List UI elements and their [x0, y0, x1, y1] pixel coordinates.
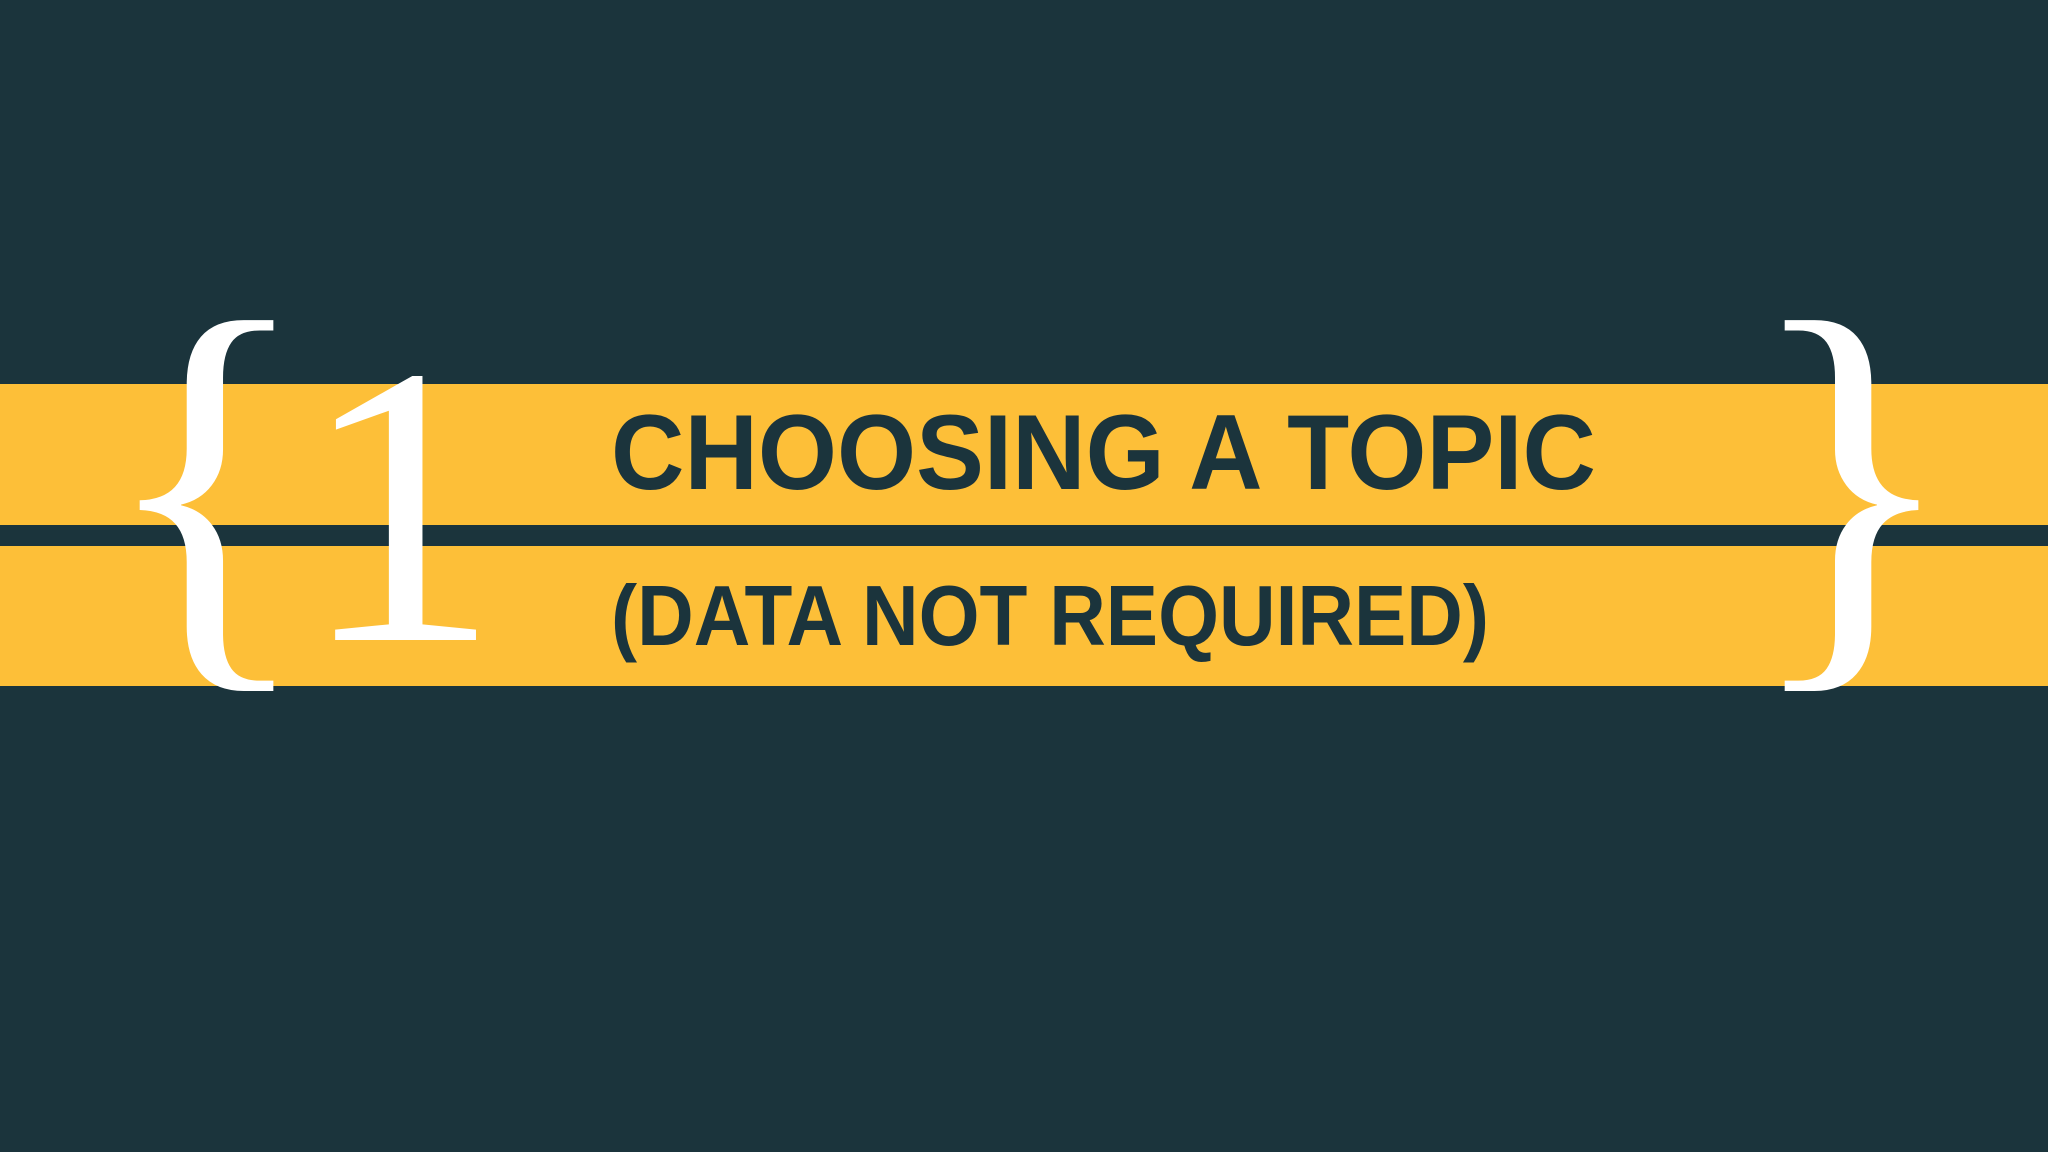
title: CHOOSING A TOPIC — [611, 392, 1596, 512]
subtitle: (DATA NOT REQUIRED) — [611, 569, 1489, 664]
band: top yellow — [0, 384, 2048, 525]
number 1: 1 — [300, 284, 500, 727]
left brace: { — [99, 232, 314, 728]
band: bottom yellow — [0, 546, 2048, 686]
right brace: } — [1744, 232, 1959, 728]
